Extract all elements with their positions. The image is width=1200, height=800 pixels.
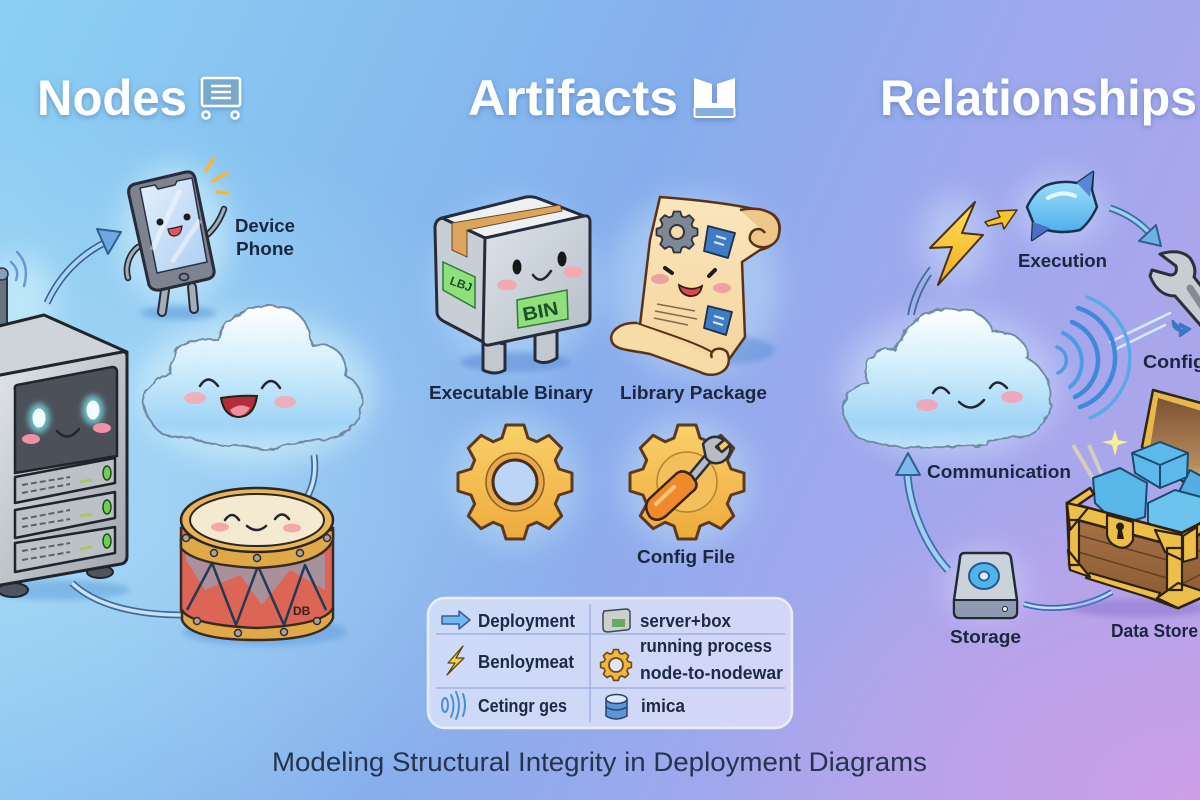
icon: execution blob bbox=[1027, 172, 1097, 240]
icon: storage drive bbox=[954, 553, 1017, 618]
data cubes bbox=[1093, 442, 1200, 535]
panel: artifacts bbox=[429, 195, 780, 567]
label: Executable Binary: Executable Binary bbox=[429, 383, 593, 403]
icon: gear with screwdriver bbox=[630, 425, 744, 539]
icon: open book on tray bbox=[694, 78, 735, 117]
icon: executable binary box: BIN bbox=[521, 298, 560, 326]
icon: cloud character bbox=[143, 306, 362, 449]
title: Nodes: Nodes bbox=[37, 70, 187, 126]
label: Config: Config bbox=[1143, 352, 1200, 372]
icon: executable binary box: LBJ bbox=[448, 274, 474, 295]
legend label: Cetingr ges: Cetingr ges bbox=[478, 696, 567, 716]
connector: storage to chest bbox=[1024, 592, 1112, 608]
label: Config File: Config File bbox=[637, 547, 735, 567]
icon: drum database character bbox=[181, 488, 347, 646]
arrow: execution to config bbox=[1110, 208, 1161, 246]
glow behind node illustrations bbox=[0, 165, 375, 465]
glow behind artifact illustrations bbox=[435, 195, 780, 547]
drive bays bbox=[15, 458, 115, 572]
label: Execution: Execution bbox=[1018, 251, 1107, 271]
connector: cloud to drum bbox=[307, 455, 315, 497]
title: Artifacts: Artifacts bbox=[468, 70, 678, 126]
icon: signal waves bbox=[1057, 297, 1170, 418]
label: Data Store: Data Store bbox=[1111, 621, 1198, 641]
sparkle rays bbox=[1102, 430, 1128, 456]
panel: relationships bbox=[840, 172, 1200, 647]
legend label: node-to-nodewar: node-to-nodewar bbox=[640, 663, 783, 683]
icon: treasure chest bbox=[1067, 390, 1200, 617]
panel: nodes bbox=[0, 159, 375, 646]
icon: small blue rotate arrow bbox=[1173, 320, 1190, 336]
lock bbox=[1107, 515, 1133, 548]
icon: yellow wave sparks bbox=[206, 159, 228, 193]
label: Communication: Communication bbox=[927, 462, 1071, 482]
label: Storage: Storage bbox=[950, 627, 1021, 647]
legend label: running process: running process bbox=[640, 636, 772, 656]
label: Device Phone: Device bbox=[235, 216, 295, 236]
glow behind relationship illustrations bbox=[840, 175, 1105, 620]
icon: drum database character: DB bbox=[293, 604, 311, 618]
icon: lightning bolt bbox=[930, 202, 983, 285]
icon: library package scroll bbox=[611, 197, 780, 375]
legend bbox=[428, 598, 792, 728]
gold rim bbox=[1067, 488, 1200, 548]
gold corners and bands bbox=[1067, 503, 1200, 608]
arrow: storage to cloud bbox=[896, 453, 948, 570]
legend icon: box bbox=[603, 609, 630, 632]
legend label: Deployment: Deployment bbox=[478, 611, 575, 631]
legend label: server+box: server+box bbox=[640, 611, 731, 631]
legend icon: waves bbox=[442, 692, 465, 719]
open lid bbox=[1142, 390, 1200, 500]
legend icon: arrow bbox=[442, 611, 470, 629]
icon: wrench bbox=[1150, 252, 1200, 327]
icon: executable binary box bbox=[435, 197, 590, 373]
footer caption: Modeling Structural Integrity in Deployment Diagrams bbox=[272, 747, 927, 777]
label: Device Phone: Phone bbox=[236, 239, 294, 259]
icon: server character bbox=[0, 315, 130, 600]
legend label: imica: imica bbox=[641, 696, 686, 716]
legend icon: database bbox=[606, 694, 627, 719]
icon: cloud character bbox=[843, 309, 1051, 448]
legend label: Benloymeat: Benloymeat bbox=[478, 652, 574, 672]
connector: cloud to lightning bbox=[908, 267, 931, 315]
title: Relationships: Relationships bbox=[880, 70, 1197, 126]
arrow: lightning to execution bbox=[985, 210, 1017, 229]
icon: phone character bbox=[127, 172, 224, 320]
legend icon: gear bbox=[601, 650, 631, 680]
arrow: server to phone bbox=[47, 229, 121, 303]
connector: server to drum bbox=[72, 583, 183, 615]
chest front bbox=[1067, 503, 1200, 608]
icon: node cart bbox=[202, 78, 240, 118]
legend icon: bolt bbox=[447, 646, 464, 675]
icon: gear bbox=[458, 425, 572, 539]
label: Library Package: Library Package bbox=[620, 383, 767, 403]
icon: antenna signal bbox=[0, 252, 26, 337]
label: Device Phone bbox=[235, 216, 295, 259]
